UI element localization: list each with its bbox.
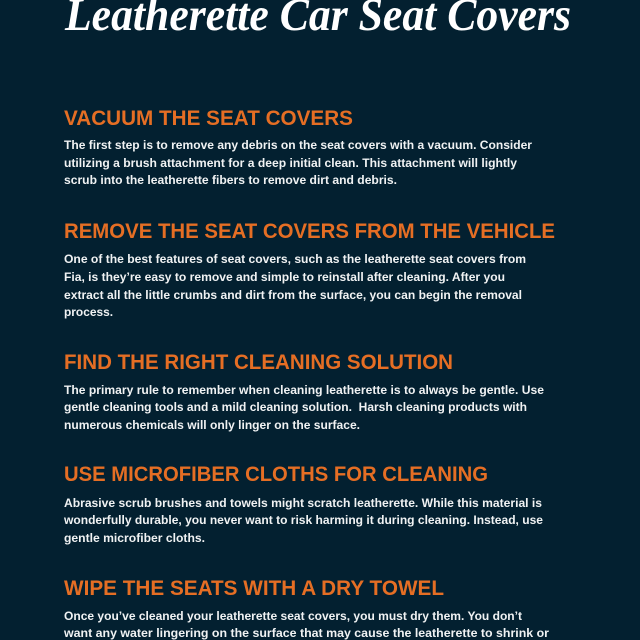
body text: microfiber: wonderfully durable, you never want to risk harming it during cleaning. Instead, use [63,513,543,527]
body text: cleaning solution: numerous chemicals will only linger on the surface. [64,418,360,432]
body text: cleaning solution: The primary rule to remember when cleaning leatherette is to always be gentle. Use [64,383,544,397]
heading: microfiber: USE MICROFIBER CLOTHS FOR CLEANING [64,462,488,486]
body text: remove: process. [64,305,113,319]
body text: remove: Fia, is they’re easy to remove and simple to reinstall after cleaning. After you [64,270,505,284]
body text: remove: extract all the little crumbs and dirt from the surface, you can begin the removal [64,288,522,302]
body text: dry towel: Once you’ve cleaned your leatherette seat covers, you must dry them. You don’t [64,609,522,623]
heading: cleaning solution: FIND THE RIGHT CLEANING SOLUTION [64,350,453,374]
body text: dry towel [63,609,549,640]
body text: vacuum: utilizing a brush attachment for a deep initial clean. This attachment will lightly [64,156,517,170]
body text: microfiber: Abrasive scrub brushes and towels might scratch leatherette. While this material is [64,496,542,510]
section: find the right cleaning solution [64,350,544,432]
body text: remove: One of the best features of seat covers, such as the leatherette seat covers from [64,252,526,266]
body text: vacuum: The first step is to remove any debris on the seat covers with a vacuum. Consider [64,138,532,152]
body text: cleaning solution [64,383,544,432]
body text: cleaning solution: gentle cleaning tools and a mild cleaning solution. Harsh cleaning products with [64,400,527,414]
body text: vacuum: scrub into the leatherette fibers to remove dirt and debris. [64,173,397,187]
body text: microfiber [63,496,543,545]
body text: microfiber: gentle microfiber cloths. [64,531,205,545]
section: remove the seat covers [64,219,555,319]
body text: vacuum [64,138,532,187]
section: wipe the seats [63,576,549,640]
heading: remove: REMOVE THE SEAT COVERS FROM THE VEHICLE [64,219,555,243]
heading: vacuum: VACUUM THE SEAT COVERS [64,106,353,130]
body text: dry towel: want any water lingering on the surface that may cause the leatherette to shrink or [63,626,549,640]
section: vacuum the seat covers [64,106,532,187]
heading: dry towel: WIPE THE SEATS WITH A DRY TOWEL [64,576,444,600]
body text: remove [64,252,526,319]
section: use microfiber cloths [63,462,543,545]
